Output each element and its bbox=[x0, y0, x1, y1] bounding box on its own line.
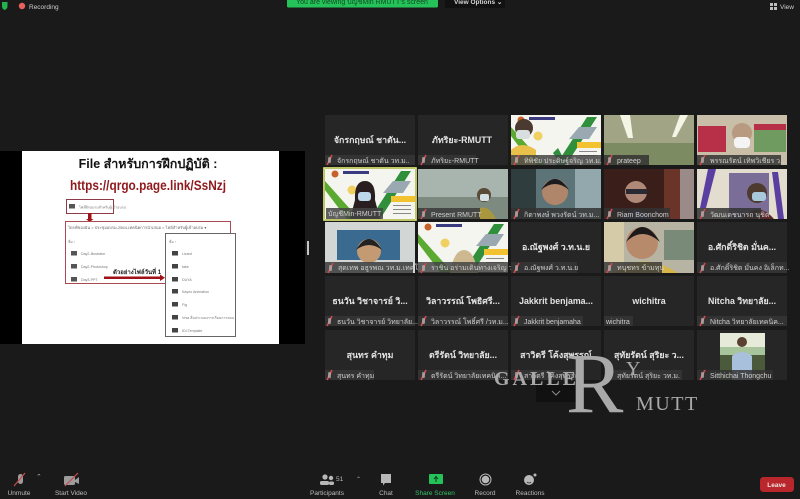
tile: row 4 col 1: ธนวัน วิชาจารย์ วิ... bbox=[332, 295, 408, 306]
example arrow bbox=[104, 267, 165, 281]
tile: row 5 col 5: Sitthichai Thongchu bbox=[710, 373, 771, 380]
folder list panel: ชื่อ ↑ bbox=[68, 239, 76, 244]
toolbar bbox=[8, 473, 794, 497]
subfolder panel: Lizard bbox=[182, 252, 192, 256]
tile: row 5 col 2 bbox=[418, 330, 508, 380]
toolbar: leave button bbox=[760, 477, 794, 492]
tile: row 3 col 5: อ.ศักดิ์ริชิต มั่นคง อิเล็กท... bbox=[710, 262, 789, 272]
slide link: https://qrgo.page.link/SsNzj bbox=[70, 177, 226, 193]
tile: row 5 col 4 bbox=[604, 330, 694, 380]
tile: row 5 col 3: สาวิตรี โค้งสุพรรณ์ bbox=[520, 349, 593, 361]
tile: row 2 col 2 bbox=[418, 169, 508, 219]
folder chip: ไฟล์ฝึกอบรมสำหรับผู้เข้าอบรม bbox=[78, 204, 127, 210]
tile: row 4 col 2: วิลาวรรณ์ โพธิศรี... bbox=[425, 295, 500, 306]
subfolder panel: fake bbox=[182, 265, 189, 269]
example arrow: ตัวอย่างไฟล์วันที่ 1 bbox=[113, 267, 162, 276]
tile: row 2 col 3 bbox=[511, 169, 601, 219]
tile: row 3 col 2: ราชิน อร่ามเดินทางเจริญ ว... bbox=[431, 264, 518, 272]
tile: row 1 col 3 bbox=[511, 115, 602, 165]
down arrow bbox=[86, 213, 94, 222]
tile: row 1 col 4: prateep bbox=[617, 158, 641, 165]
top bar: recording status: Recording bbox=[29, 4, 59, 11]
toolbar: chat bbox=[379, 474, 393, 497]
tile: row 4 col 4: wichitra bbox=[605, 319, 630, 326]
toolbar: unmute bbox=[8, 473, 42, 497]
tile: row 4 col 4: wichitra bbox=[631, 296, 666, 306]
subfolder panel bbox=[166, 234, 236, 336]
tile: row 5 col 5 bbox=[697, 330, 787, 380]
watermark: Gallery RMUTT: Y bbox=[626, 358, 640, 380]
tile: row 5 col 1 bbox=[325, 330, 415, 380]
tile: row 3 col 4 bbox=[604, 222, 694, 273]
tile: row 1 col 1: จักรกฤษณ์ ชาตัน วท.ม.. bbox=[337, 157, 410, 165]
tile: row 4 col 2: วิลาวรรณ์ โพธิ์ศรี /วท.ม... bbox=[431, 316, 509, 326]
subfolder panel: Vrsa สื่อประกอบการเรียนการสอน bbox=[182, 315, 235, 320]
tile: row 2 col 1, active speaker: บัญชีMin-RMUTT bbox=[328, 210, 382, 218]
tile: row 2 col 2: Present RMUTT bbox=[431, 212, 482, 219]
subfolder panel: DUYA bbox=[182, 278, 192, 282]
tile: row 2 col 5 bbox=[697, 169, 787, 219]
tile: row 4 col 5: Nitcha วิทยาลัย... bbox=[708, 296, 776, 306]
tile: row 3 col 3: อ.ณัฐพงศ์ ว.ท.น.ย bbox=[524, 264, 578, 272]
tile: row 3 col 3: อ.ณัฐพงศ์ ว.ท.น.ย bbox=[522, 241, 590, 253]
subfolder panel: Kayno Animation bbox=[182, 290, 209, 294]
tile: row 2 col 5: วัฒนเดชนารถ นุชิต bbox=[710, 211, 770, 219]
toolbar: record: Record bbox=[475, 490, 496, 497]
toolbar: record bbox=[475, 474, 496, 497]
tile: row 3 col 1: สุดเทพ อธูรพณ วท.ม.เทคโน bbox=[338, 263, 423, 272]
panel divider handle bbox=[307, 241, 309, 255]
toolbar: chat: Chat bbox=[379, 490, 393, 497]
tile: row 4 col 4 bbox=[604, 276, 694, 326]
toolbar: unmute: Unmute bbox=[8, 490, 31, 497]
toolbar: reactions bbox=[516, 474, 545, 497]
folder list panel: Day3-PPT bbox=[81, 278, 98, 282]
tile: row 5 col 2: ตรีรัตน์ วิทยาลัย... bbox=[429, 349, 497, 360]
tile: row 2 col 3: กิตาพงษ์ พวงรัตน์ วท.ม... bbox=[524, 211, 599, 219]
tile: row 5 col 2: ตรีรัตน์ วิทยาลัยเทคนิค... bbox=[431, 372, 506, 380]
panel: shared slide bbox=[0, 151, 305, 344]
toolbar: start video: Start Video bbox=[55, 490, 87, 497]
tile: row 3 col 5: อ.ศักดิ์ริชิต มั่นค... bbox=[708, 240, 776, 252]
folder chip bbox=[66, 200, 127, 214]
tile: row 1 col 2 bbox=[418, 115, 508, 165]
toolbar: share screen bbox=[415, 474, 455, 497]
subfolder panel: ชื่อ ↑ bbox=[169, 239, 177, 244]
tile: row 4 col 1 bbox=[325, 276, 418, 326]
tile: row 3 col 1 bbox=[325, 222, 423, 273]
watermark: Gallery RMUTT: R bbox=[566, 335, 624, 431]
watermark: Gallery RMUTT: GALLE bbox=[494, 368, 579, 390]
toolbar: participants: 51 bbox=[336, 476, 344, 483]
subfolder panel: IDI-Template bbox=[182, 329, 202, 333]
tile: row 3 col 3 bbox=[511, 222, 601, 273]
toolbar: participants: ⌃ bbox=[356, 476, 361, 483]
tile: row 4 col 3 bbox=[511, 276, 601, 326]
folder list panel bbox=[66, 222, 230, 284]
tile: row 4 col 5: Nitcha วิทยาลัยเทคนิค... bbox=[710, 318, 784, 326]
toolbar: unmute: ⌃ bbox=[36, 473, 42, 481]
tile: row 1 col 2: ภัทริยะ-RMUTT bbox=[431, 157, 479, 165]
subfolder panel: Fig bbox=[182, 303, 187, 307]
pagination chevron bbox=[536, 385, 576, 402]
watermark: Gallery RMUTT bbox=[494, 335, 699, 431]
tile: row 4 col 5 bbox=[697, 276, 787, 326]
toolbar: participants bbox=[310, 474, 361, 497]
tile: row 1 col 3: ทิพิชัย ประดิษฐ์จริญ วท.ม. bbox=[524, 157, 602, 165]
top bar: recording status bbox=[2, 2, 59, 11]
tile: row 1 col 5 bbox=[697, 115, 787, 165]
screen share banner bbox=[287, 0, 505, 8]
tile: row 1 col 1 bbox=[325, 115, 415, 165]
tile: row 4 col 3: Jakkrit benjama... bbox=[519, 296, 593, 306]
watermark: Gallery RMUTT: MUTT bbox=[636, 393, 699, 415]
toolbar: participants: Participants bbox=[310, 490, 345, 497]
toolbar: reactions: Reactions bbox=[516, 490, 545, 497]
folder list panel: ไดรฟ์ของฉัน > ประชุมอบรม-2564-เทคนิคการนำเสนอ > ไฟล์สำหรับผู้เข้าอบรม ▾ bbox=[67, 225, 206, 231]
view button: View bbox=[780, 4, 794, 11]
toolbar: share screen: Share Screen bbox=[415, 490, 455, 497]
tile: row 4 col 3: Jakkrit benjamaha bbox=[524, 319, 581, 326]
toolbar: leave button: Leave bbox=[767, 482, 786, 489]
folder list panel: Day2-Photoshop bbox=[81, 265, 108, 269]
tile: row 5 col 3 bbox=[511, 330, 601, 380]
tile: row 3 col 4: ทนุชทร ข้ามทุน bbox=[617, 264, 664, 272]
tile: row 5 col 4: สุทัยรัตน์ สุริยะ วท.ม. bbox=[617, 372, 680, 380]
tile: row 1 col 2: ภัทริยะ-RMUTT bbox=[432, 135, 493, 145]
view button bbox=[770, 3, 794, 11]
tile: row 1 col 5: พรรณรัตน์ เทิพวิเชียร ว... bbox=[710, 157, 786, 165]
tile: row 4 col 1: ธนวัน วิชาจารย์ วิทยาลัย... bbox=[337, 318, 418, 326]
tile: row 5 col 1: สุนทร คำทุม bbox=[347, 350, 394, 361]
tile: row 4 col 2 bbox=[418, 276, 509, 326]
slide title: File สำหรับการฝึกปฏิบัติ : bbox=[79, 157, 217, 172]
tile: row 3 col 2 bbox=[418, 222, 518, 273]
tile: row 3 col 5 bbox=[697, 222, 789, 273]
toolbar: start video bbox=[55, 473, 87, 497]
tile: row 2 col 4 bbox=[604, 169, 694, 219]
tile: row 5 col 4: สุทัยรัตน์ สุริยะ ว... bbox=[614, 349, 684, 361]
tile: row 1 col 4 bbox=[604, 115, 694, 165]
tile: row 2 col 1, active speaker bbox=[324, 168, 416, 220]
tile: row 2 col 4: Riam Boonchom bbox=[617, 212, 669, 219]
tile: row 5 col 3: สาวิตรี โค้งสุพรรณ์ bbox=[524, 371, 582, 380]
tile: row 5 col 1: สุนทร คำทุม bbox=[337, 372, 374, 380]
folder list panel: Day2-Illustrator bbox=[81, 252, 106, 256]
tile: row 1 col 1: จักรกฤษณ์ ชาตัน... bbox=[334, 134, 406, 145]
